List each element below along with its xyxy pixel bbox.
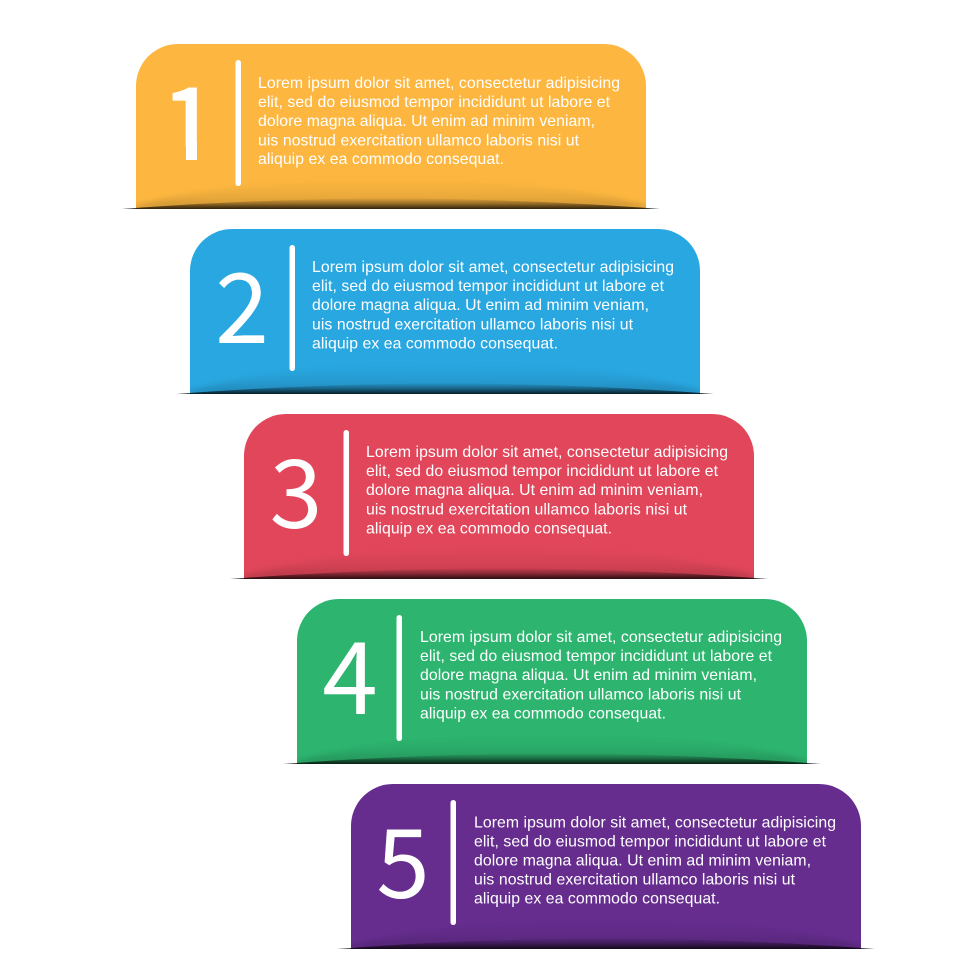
text block: Lorem ipsum dolor sit amet, consectetur adipisicing [366,444,728,461]
card background [351,784,861,949]
card background [297,599,807,764]
text block: dolore magna aliqua. Ut enim ad minim veniam, [420,667,757,684]
panel: step 3 [230,414,768,579]
card background [244,414,754,579]
bottom shadow [297,745,807,763]
text block: dolore magna aliqua. Ut enim ad minim veniam, [258,113,595,130]
number: 1 [162,44,217,189]
text block: elit, sed do eiusmod tempor incididunt ut labore et [366,463,719,480]
base crescent [283,753,821,764]
text block: aliquip ex ea commodo consequat. [366,520,612,538]
bottom shadow [190,373,700,393]
panel: step 4 [283,598,821,764]
text block: aliquip ex ea commodo consequat. [312,336,558,352]
text block: elit, sed do eiusmod tempor incididunt ut labore et [474,834,827,850]
text block: aliquip ex ea commodo consequat. [420,706,666,722]
number: 2 [215,230,269,371]
divider [344,430,349,556]
text block: uis nostrud exercitation ullamco laboris nisi ut [474,872,796,888]
base crescent [176,383,714,394]
bottom shadow [136,187,646,208]
number: 4 [322,598,378,743]
number: 5 [376,787,430,926]
divider [396,615,402,741]
base crescent [230,568,768,579]
panel: step 2 [176,229,714,394]
text block: dolore magna aliqua. Ut enim ad minim veniam, [312,297,649,314]
text block: Lorem ipsum dolor sit amet, consectetur adipisicing [312,259,674,276]
number [172,88,197,160]
text block: uis nostrud exercitation ullamco laboris nisi ut [312,316,634,334]
text block: uis nostrud exercitation ullamco laboris nisi ut [366,502,688,518]
number: 3 [270,419,322,556]
card background [190,229,700,394]
base crescent [337,938,875,949]
text block: aliquip ex ea commodo consequat. [258,151,504,168]
text block: dolore magna aliqua. Ut enim ad minim veniam, [474,852,811,870]
text block: elit, sed do eiusmod tempor incididunt ut labore et [258,94,611,111]
text block: Lorem ipsum dolor sit amet, consectetur adipisicing [420,629,782,646]
text block: aliquip ex ea commodo consequat. [474,890,720,908]
card background [136,44,646,209]
text block: dolore magna aliqua. Ut enim ad minim veniam, [366,482,703,499]
text block: uis nostrud exercitation ullamco laboris nisi ut [258,132,580,150]
text block: elit, sed do eiusmod tempor incididunt ut labore et [420,648,773,665]
base crescent [122,198,660,209]
text block: uis nostrud exercitation ullamco laboris nisi ut [420,686,742,704]
text block: Lorem ipsum dolor sit amet, consectetur adipisicing [474,814,836,832]
divider [290,245,295,371]
bottom shadow [244,558,754,578]
text block: Lorem ipsum dolor sit amet, consectetur adipisicing [258,75,620,92]
panel: step 1 [122,44,660,209]
panel: step 5 [337,784,875,949]
divider [236,60,241,186]
divider [450,800,456,925]
text block: elit, sed do eiusmod tempor incididunt ut labore et [312,278,665,295]
bottom shadow [351,934,861,948]
